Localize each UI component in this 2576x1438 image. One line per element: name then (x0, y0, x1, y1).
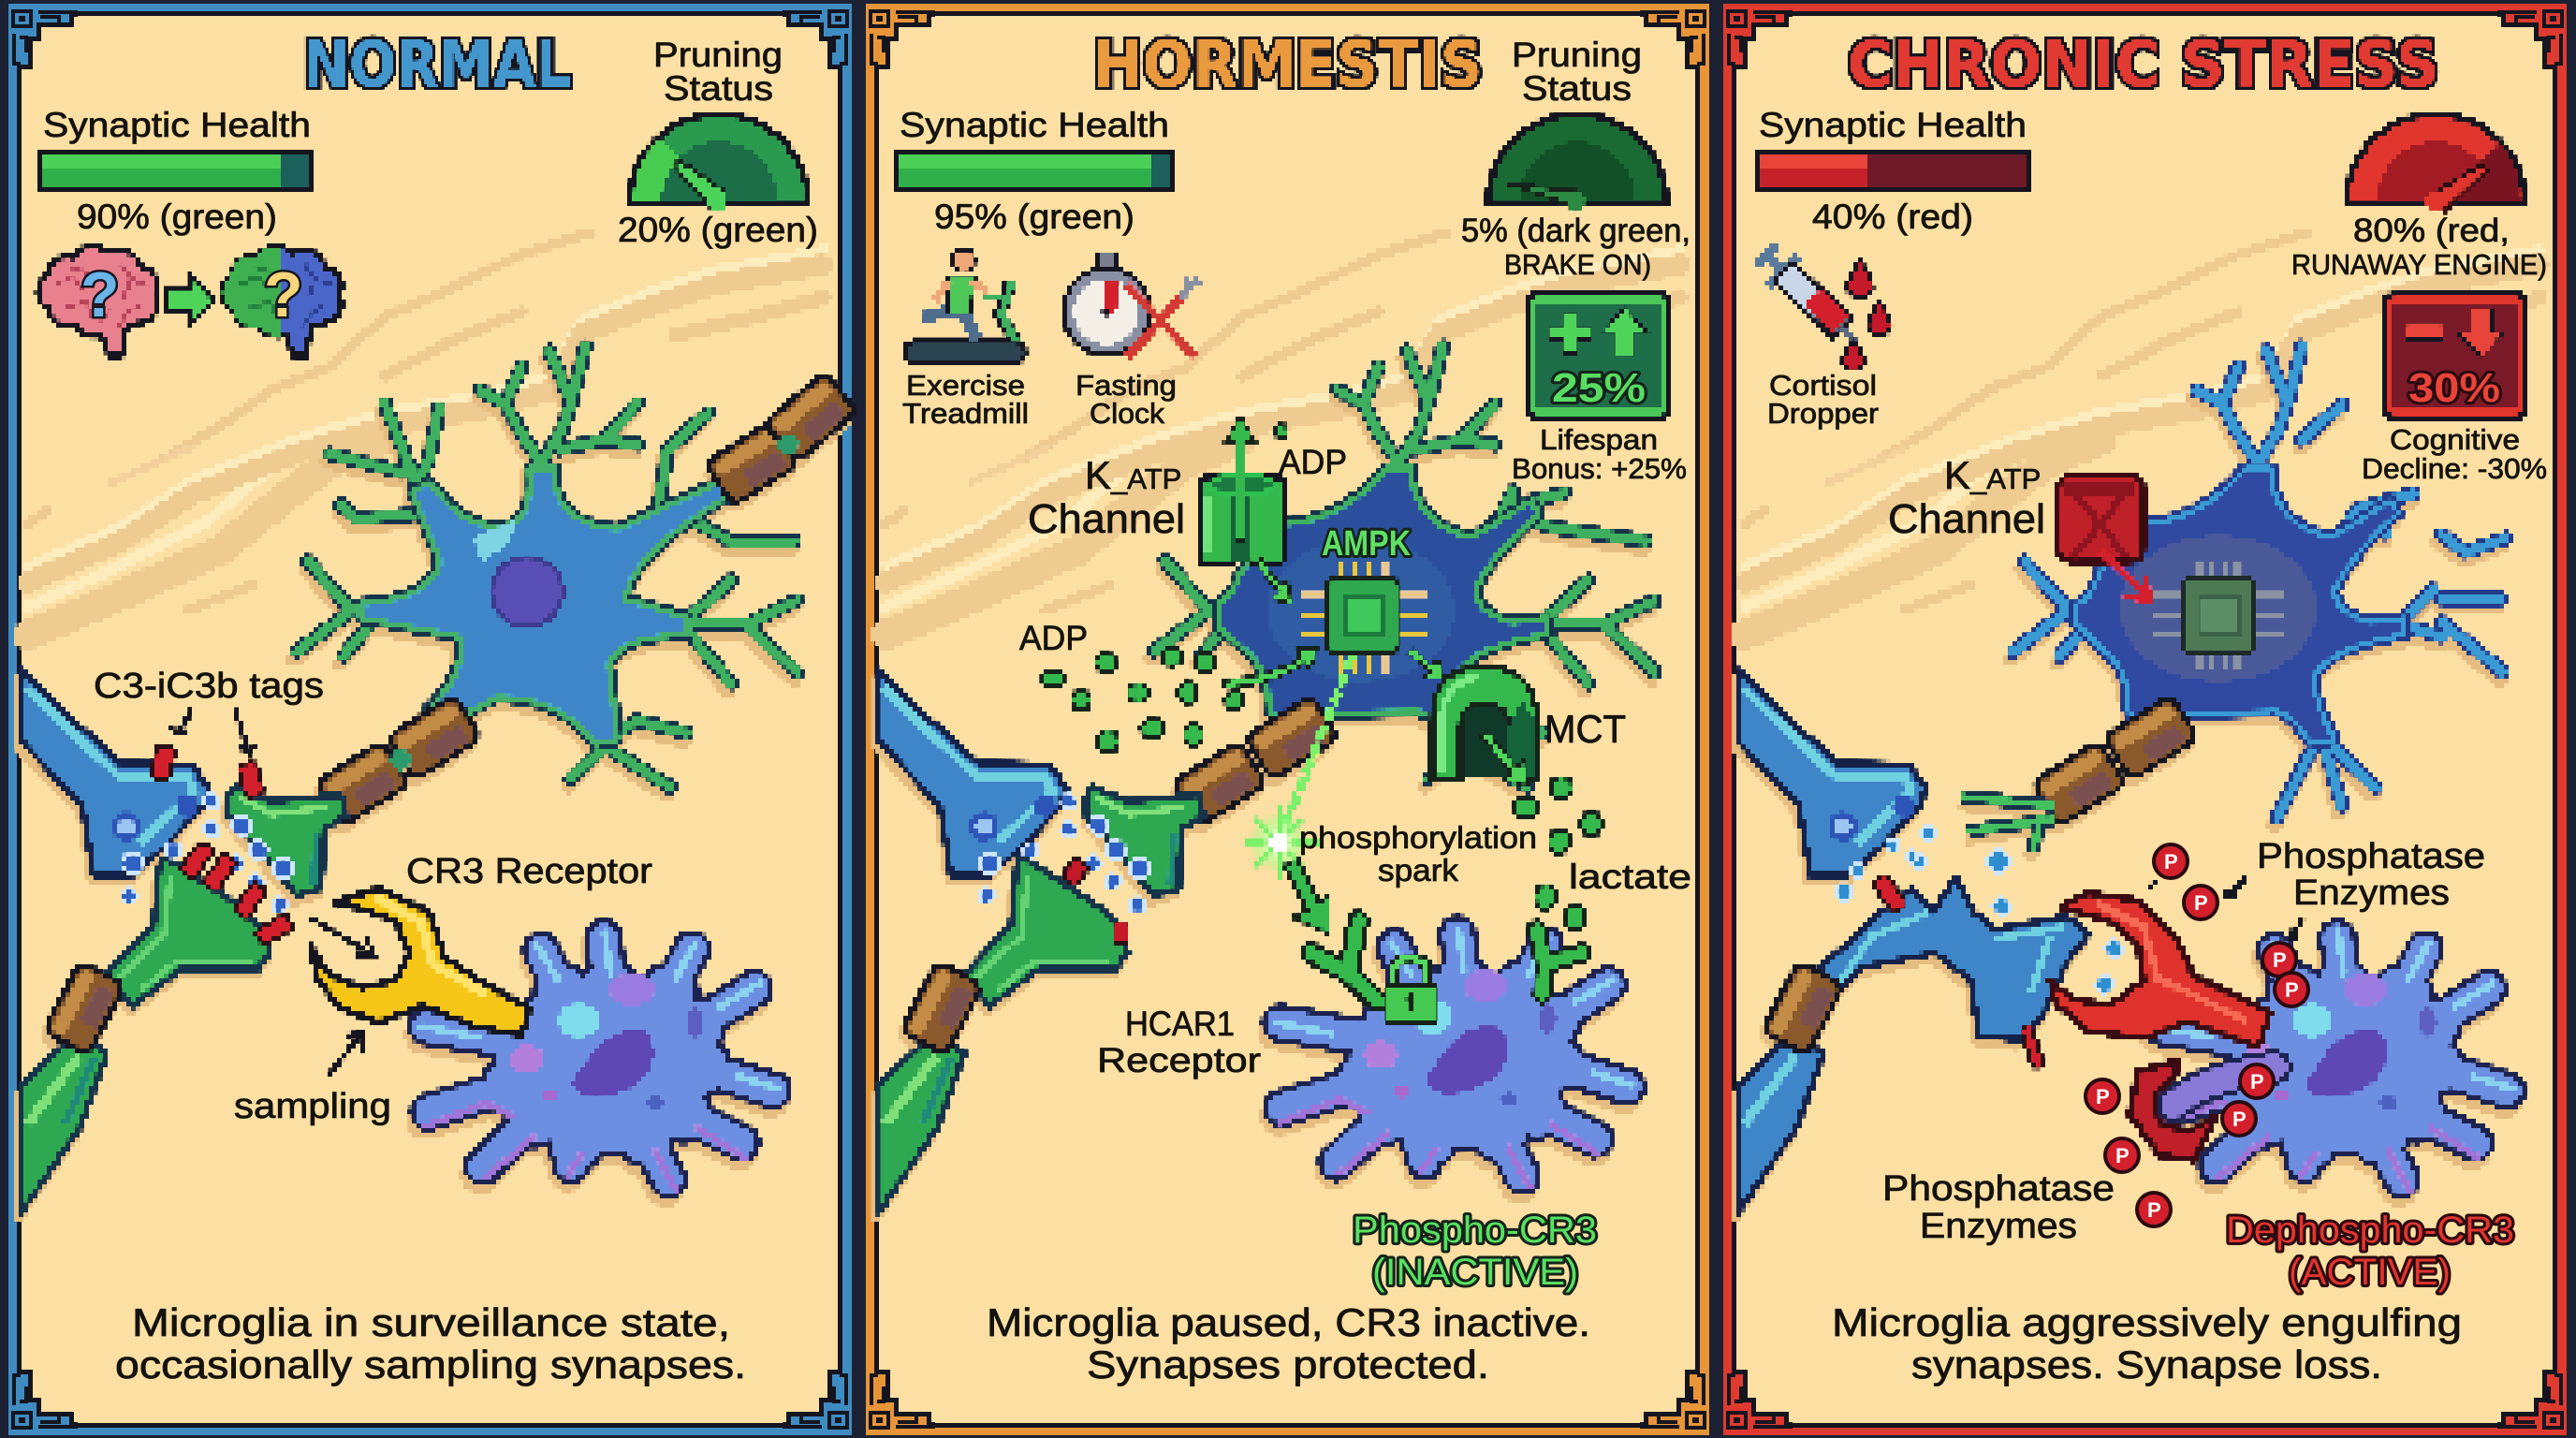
phosphatase enzymes: P tokens: P (2096, 1085, 2110, 1108)
arrow: into claw (308, 917, 373, 955)
label: KATP channel: Channel (1888, 496, 2045, 542)
label: HCAR1 receptor: Receptor (1097, 1041, 1261, 1079)
phosphatase enzymes: P tokens: P (2232, 1108, 2247, 1131)
microglia (421, 932, 779, 1191)
label: HCAR1 receptor: HCAR1 (1125, 1005, 1235, 1043)
soma (360, 468, 732, 744)
vesicles (1836, 826, 2122, 993)
caption: Synapses protected. (1087, 1343, 1489, 1387)
label: lifespan bonus: Lifespan (1540, 423, 1658, 456)
arrow: green (166, 277, 214, 323)
HCAR1 receptors (1311, 921, 1581, 1002)
label: sampling: sampling (234, 1087, 391, 1126)
phosphatase enzymes: P tokens: P (2250, 1070, 2264, 1093)
CR3 receptor claw (311, 888, 530, 1035)
pruning gauge (630, 114, 808, 211)
AMPK chip (1303, 562, 1427, 674)
panel frame: orange (866, 4, 1709, 1435)
lower green terminal and axon (22, 857, 270, 1212)
value: pruning: BRAKE ON) (1504, 248, 1651, 281)
C3 tags (1872, 873, 2044, 1069)
title: HORMESTIS (1093, 28, 1483, 102)
decline box (2385, 294, 2525, 418)
MCT transporter (1432, 667, 1537, 779)
phosphorylation beam (1279, 655, 1353, 843)
brain question marks: ? (80, 259, 120, 330)
label: C3-iC3b tags: C3-iC3b tags (94, 667, 324, 706)
lower green terminal and axon (879, 857, 1127, 1212)
caption (987, 1300, 1590, 1387)
label: pruning status: Status (664, 69, 773, 108)
phosphatase enzymes: P tokens: P (2115, 1144, 2130, 1167)
label: cortisol dropper: Cortisol (1769, 369, 1877, 402)
arrow: spark to receptor (1284, 859, 1329, 934)
value: pruning: RUNAWAY ENGINE) (2291, 248, 2547, 281)
panel frame: blue (8, 4, 852, 1435)
soma highlight (473, 520, 515, 562)
neuron and synapse (1738, 346, 2512, 1212)
arrow: channel to chip (1256, 560, 1292, 604)
C3-iC3b tags (150, 744, 294, 946)
value: pruning: 5% (dark green, (1461, 213, 1690, 249)
nucleus (491, 557, 563, 626)
label: pruning status: Pruning (653, 36, 783, 74)
arrow: chip to MCT (1408, 648, 1445, 680)
label: exercise treadmill: Treadmill (902, 397, 1029, 430)
label: CR3 receptor: CR3 Receptor (406, 852, 652, 891)
label: KATP channel (1888, 453, 2045, 542)
phosphorylation spark (1243, 803, 1318, 882)
label: cognitive decline: Cognitive (2390, 423, 2520, 456)
label: phosphorylation spark (1299, 820, 1537, 888)
caption: Microglia paused, CR3 inactive. (987, 1300, 1590, 1344)
title: CHRONIC STRESS (1848, 28, 2439, 102)
label: cortisol dropper: Dropper (1767, 397, 1879, 430)
caption: synapses. Synapse loss. (1911, 1343, 2382, 1387)
phosphatase enzymes: P tokens: P (2194, 891, 2208, 915)
label: lifespan bonus: Bonus: +25% (1512, 452, 1687, 485)
label: KATP channel (1028, 453, 1185, 542)
lifespan box (1528, 294, 1670, 418)
artwork: normal scene (22, 114, 857, 1212)
phosphatase enzymes: P tokens: P (2164, 850, 2178, 873)
brain question marks: ? (264, 259, 303, 330)
red CR3 claw, engulfing (2050, 893, 2270, 1047)
label: lactate: lactate (1569, 858, 1691, 896)
node (390, 750, 411, 770)
label: phosphatase enzymes bottom (1882, 1169, 2115, 1246)
caption: occasionally sampling synapses. (115, 1343, 746, 1387)
phosphatase enzymes: P tokens (2086, 844, 2308, 1226)
icon: green and blue brain (223, 246, 342, 356)
lower axon myelin (315, 696, 481, 826)
KATP channel (1199, 475, 1285, 564)
label: phosphatase enzymes top (2257, 837, 2485, 913)
sand texture (28, 232, 824, 635)
broken green terminal (1962, 797, 2056, 852)
label: pruning status: Status (1522, 69, 1632, 108)
synaptic health bar (896, 149, 1174, 192)
soma center (2120, 536, 2317, 682)
label: phosphorylation spark: phosphorylation (1299, 820, 1537, 855)
lower axon myelin (2032, 696, 2198, 826)
soma rim (360, 468, 732, 744)
phosphatase enzymes: P tokens: P (2273, 948, 2287, 972)
label: lifespan bonus (1512, 423, 1687, 485)
label: dephospho-CR3 active: (ACTIVE) (2289, 1252, 2451, 1293)
soma rim (2077, 468, 2405, 744)
presynaptic terminal (22, 670, 209, 875)
arrow: ADP to chip (1223, 648, 1318, 688)
lower axon myelin (1173, 696, 1339, 826)
arrow: blocked to chip (2100, 550, 2149, 601)
label: phospho-CR3 inactive (1353, 1210, 1597, 1293)
label: MCT: MCT (1544, 707, 1626, 751)
soma glow (1267, 539, 1455, 682)
caption: Microglia aggressively engulfing (1832, 1300, 2462, 1344)
value: synaptic health: 90% (green) (77, 198, 277, 236)
upper green terminal (228, 787, 346, 896)
phosphatase enzymes: P tokens: P (2285, 978, 2299, 1002)
broken green terminal highlight (1962, 797, 2056, 852)
inactive chip (2153, 562, 2286, 670)
microglia engulfing arm (2174, 1067, 2275, 1105)
synaptic health bar (1755, 149, 2032, 192)
label: phosphatase enzymes top: Enzymes (2293, 873, 2450, 913)
soma (1218, 468, 1545, 744)
label: phosphatase enzymes bottom: Enzymes (1920, 1207, 2077, 1246)
sand texture (1745, 232, 2540, 635)
brain question marks (80, 259, 303, 330)
label: exercise treadmill (902, 369, 1029, 430)
value: pruning: 20% (green) (618, 211, 818, 249)
arrows: tags (170, 710, 255, 754)
artwork: chronic stress scene (1738, 114, 2540, 1212)
label: synaptic health: Synaptic Health (900, 106, 1169, 144)
caption: Microglia in surveillance state, (132, 1300, 730, 1344)
value: synaptic health: 40% (red) (1812, 198, 1973, 236)
synaptic health bar (37, 149, 315, 192)
label: pruning status (653, 36, 783, 108)
label: pruning status (1512, 36, 1642, 108)
post-synaptic blue terminal (1762, 877, 2088, 1055)
soma rim (1218, 468, 1545, 744)
microglia (2155, 932, 2512, 1191)
label: dephospho-CR3 active: Dephospho-CR3 (2226, 1210, 2514, 1251)
myelin: upper axon (706, 373, 857, 506)
label: cognitive decline (2362, 423, 2547, 485)
soma (2077, 468, 2405, 744)
title: NORMAL (303, 28, 571, 102)
value: synaptic health: 95% (green) (934, 198, 1134, 236)
post-synaptic blue axon (1738, 1034, 1823, 1212)
pruning gauge (2347, 114, 2525, 211)
value: 25%: 25% (1552, 365, 1646, 411)
label: fasting clock: Clock (1090, 397, 1165, 430)
label: phospho-CR3 inactive: Phospho-CR3 (1353, 1210, 1597, 1251)
icon: syringe (1757, 244, 1858, 345)
phosphatase enzymes: P tokens: P (2147, 1198, 2161, 1222)
panel frame: red (1723, 4, 2567, 1435)
panel: normal (8, 4, 857, 1435)
label: phospho-CR3 inactive: (INACTIVE) (1372, 1252, 1578, 1293)
panel: chronic stress (1723, 4, 2567, 1435)
vesicles (979, 794, 1150, 913)
label: KATP channel: Channel (1028, 496, 1185, 542)
KATP channel blocked (2058, 476, 2144, 562)
neuron and synapse (879, 346, 1654, 1212)
artwork: hormesis scene (879, 114, 1681, 1212)
icon: treadmill (905, 249, 1025, 362)
dendrites (297, 346, 797, 787)
icon: fasting clock (1063, 253, 1200, 358)
icon: pink brain (38, 246, 157, 356)
label: ADP left: ADP (1019, 619, 1088, 657)
label: KATP channel: K_ATP (1085, 453, 1181, 497)
ADP particles (1043, 424, 1287, 753)
cortisol drops (1843, 260, 1891, 370)
label: dephospho-CR3 active (2226, 1210, 2514, 1293)
label: phosphatase enzymes bottom: Phosphatase (1882, 1169, 2115, 1209)
label: ADP top: ADP (1279, 443, 1347, 481)
vesicles (122, 794, 293, 913)
caption (115, 1300, 746, 1387)
label: cortisol dropper (1767, 369, 1879, 430)
value: pruning: 80% (red, (2353, 213, 2510, 249)
arrow: MCT out (1482, 732, 1528, 786)
upper green terminal (1086, 787, 1204, 896)
panel: hormesis (866, 4, 1709, 1435)
caption (1832, 1300, 2462, 1387)
label: phosphorylation spark: spark (1378, 853, 1459, 888)
presynaptic terminal (1738, 670, 1925, 875)
label: synaptic health: Synaptic Health (1759, 106, 2027, 144)
label: KATP channel: K_ATP (1944, 453, 2041, 497)
label: AMPK: AMPK (1322, 524, 1411, 564)
dendrites (1154, 346, 1654, 787)
pruning gauge (1488, 114, 1666, 210)
red CR3 claw, detached (2130, 1061, 2215, 1160)
value: pruning (2291, 213, 2547, 281)
label: HCAR1 receptor (1097, 1005, 1261, 1079)
value: 30%: 30% (2408, 365, 2500, 411)
label: synaptic health: Synaptic Health (43, 106, 311, 144)
label: exercise treadmill: Exercise (906, 369, 1025, 402)
neuron and synapse (22, 346, 857, 1212)
microglia (1275, 929, 1632, 1187)
presynaptic terminal (879, 670, 1066, 875)
C3 tags (residual) (1061, 857, 1128, 943)
arrow: sampling (328, 1034, 361, 1077)
label: fasting clock: Fasting (1076, 369, 1177, 402)
icon: lock (1385, 959, 1437, 1024)
label: pruning status: Pruning (1512, 36, 1642, 74)
label: fasting clock (1076, 369, 1177, 430)
broken dendrites (2013, 346, 2506, 817)
arrow: up through channel (1225, 416, 1255, 541)
lactate particles (1515, 777, 1602, 931)
label: phosphatase enzymes top: Phosphatase (2257, 837, 2485, 876)
value: pruning (1461, 213, 1690, 281)
label: cognitive decline: Decline: -30% (2362, 452, 2547, 485)
sand texture (886, 232, 1681, 635)
phosphatase arrows (2146, 877, 2303, 939)
